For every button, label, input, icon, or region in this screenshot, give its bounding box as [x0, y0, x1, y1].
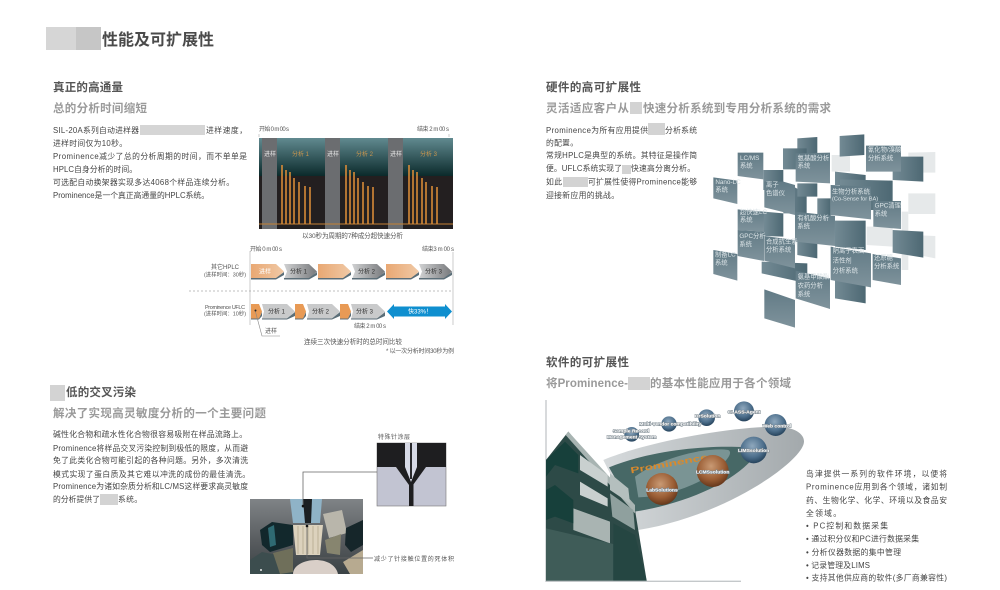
subheading: Prominence performance: [546, 376, 792, 390]
text block: hardware description: 的配置。: [546, 138, 578, 148]
title: [46, 27, 214, 50]
image: autosampler needle photo: [250, 499, 363, 574]
text block: throughput description: SIL-20A系列自动进样器: [53, 125, 139, 135]
diagram: scalable system tiles: 分析系统: [766, 244, 792, 253]
chart: timeline comparison: 连续三次快速分析时的总时间比较: [304, 337, 402, 346]
subheading: flexible systems: 灵活适应客户从: [546, 101, 630, 115]
heading: high throughput: 真正的高通量: [53, 80, 124, 94]
text block: hardware description: 便。UFLC系统实现了: [546, 163, 622, 173]
chart: timeline comparison: Prominence UFLC: [205, 305, 245, 311]
image: needle coating cross-section: [377, 443, 446, 506]
chart: chromatogram cycles: 结束 2 m 00 s: [417, 125, 449, 133]
row: other HPLC: [251, 264, 452, 280]
chart: timeline comparison: 其它HPLC: [211, 263, 240, 271]
chart: timeline comparison: * 以一次分析时间30秒为例: [386, 347, 454, 355]
diagram: scalable system tiles: 系统: [715, 258, 728, 267]
diagram: scalable system tiles: GPC分析: [739, 231, 766, 240]
diagram: scalable system tiles: 系统: [740, 160, 753, 169]
subheading: solves main problem: 解决了实现高灵敏度分析的一个主要问题: [53, 406, 266, 420]
text block: hardware description: Prominence为所有应用提供: [546, 125, 648, 135]
arrow: 33% faster: 快33%！: [408, 308, 432, 316]
diagram: scalable system tiles: 氰化物/溴酸: [868, 145, 902, 154]
row: other HPLC: 分析 2: [358, 268, 376, 276]
diagram: scalable system tiles: 系统: [740, 214, 753, 223]
sphere labels: DrSolution: [695, 413, 720, 419]
text block: hardware description: 迎接新应用的挑战。: [546, 190, 619, 200]
diagram: scalable system tiles: 生物分析系统: [832, 186, 871, 195]
diagram: scalable system tiles: 系统: [739, 239, 753, 248]
text block: software description: 岛津提供一系列的软件环境，以便将: [806, 468, 947, 478]
text block: carryover description: [53, 429, 250, 505]
label: Prominence logo: Prominence: [630, 452, 709, 475]
callout: special needle coating: [302, 433, 410, 508]
diagram: scalable system tiles: Nano-LC: [715, 179, 741, 186]
text block: hardware description: 如此: [546, 176, 562, 186]
subheading: flexible systems: 快速分析系统到专用分析系统的需求: [643, 101, 832, 115]
text block: hardware description: 分析系统: [665, 125, 697, 135]
diagram: scalable system tiles: 系统: [798, 289, 811, 298]
text block: hardware description: 快速高分离分析。: [631, 163, 695, 173]
sphere labels: LabSolutions: [646, 487, 678, 493]
chart: chromatogram cycles: 分析 1: [292, 150, 310, 158]
arrow: 33% faster: [387, 304, 452, 319]
diagram: scalable system tiles: 氨基酸分析: [798, 153, 830, 162]
diagram: scalable system tiles: 分析系统: [833, 266, 859, 275]
text block: throughput description: 可选配自动换架器实现多达4068个样品连续分析。: [53, 177, 234, 187]
text block: hardware description: [546, 123, 697, 200]
row: other HPLC: 分析 3: [425, 268, 443, 276]
heading: hardware scalability: 硬件的高可扩展性: [546, 80, 642, 94]
chart: chromatogram cycles: 分析 2: [356, 150, 374, 158]
text block: carryover description: Prominence将样品交叉污染控制到极低的限度，从而避: [53, 443, 248, 453]
chart: chromatogram cycles: 以30秒为周期的7种成分超快速分析: [302, 231, 403, 240]
sphere labels: Multi-vendor compatibility: [639, 421, 702, 427]
chart: timeline comparison: [189, 245, 454, 355]
text block: hardware description: 可扩展性使得Prominence能够: [588, 176, 697, 186]
row: Prominence UFLC: [251, 304, 452, 320]
text block: software description: 药、生物化学、化学、环境以及食品安: [806, 495, 947, 505]
diagram: scalable system tiles: LC/MS: [740, 155, 759, 162]
sphere labels: [607, 409, 792, 493]
sphere group: [624, 401, 787, 505]
row: other HPLC: 进样: [259, 268, 271, 276]
diagram: scalable system tiles: GPC清理: [875, 200, 902, 209]
text block: software description: • PC控制和数据采集: [806, 520, 888, 530]
chart: timeline comparison: 结束 2 m 00 s: [354, 322, 386, 330]
diagram: scalable system tiles: 还原糖: [874, 252, 894, 261]
chart: chromatogram cycles: 进样: [390, 150, 402, 158]
heading: low carryover: 低的交叉污染: [66, 385, 136, 399]
subheading: Prominence performance: 的基本性能应用于各个领域: [650, 376, 792, 390]
diagram: scalable system tiles: 活性剂: [833, 256, 852, 265]
chart: chromatogram cycles: [259, 125, 453, 240]
subheading: flexible systems: [546, 101, 832, 115]
text block: carryover description: 免了此类化合物可能引起的各种问题。另外，多次清洗: [53, 455, 248, 465]
text block: software description: Prominence应用到各个领域，诸如制: [806, 482, 947, 492]
diagram: scalable system tiles: 离子: [766, 180, 779, 189]
row: Prominence UFLC: 分析 3: [356, 308, 374, 316]
diagram: scalable system tiles: 系统: [797, 221, 811, 230]
chart: timeline comparison: (进样时间：30秒): [204, 270, 246, 278]
chart: chromatogram cycles: 分析 3: [420, 150, 438, 158]
row: Prominence UFLC: 分析 2: [312, 308, 330, 316]
text block: throughput description: Prominence是一个真正高通量的HPLC系统。: [53, 190, 209, 200]
chart: timeline comparison: 结束3 m 00 s: [422, 245, 454, 253]
title: 性能及可扩展性: [102, 30, 214, 49]
callout: reduced dead volume: 减少了针接触位置的死体积: [374, 555, 454, 563]
swoosh: [603, 427, 804, 530]
diagram: scalable system tiles: 超快速LC: [740, 207, 767, 216]
diagram: scalable system tiles: 有机酸分析: [797, 213, 830, 222]
diagram: scalable system tiles: 合成抗生素: [766, 236, 798, 245]
panel: hardware scalability: [546, 80, 935, 328]
text block: software description: • 分析仪器数据的集中管理: [806, 547, 901, 557]
sphere labels: CLASS-Agent: [728, 409, 761, 415]
chart: timeline comparison: 开始 0 m 00 s: [250, 245, 282, 253]
diagram: scalable system tiles: 分析系统: [874, 261, 900, 270]
text block: throughput description: 进样速度，: [206, 125, 247, 135]
diagram: scalable system tiles: 阴离子表面: [833, 246, 864, 255]
text block: carryover description: 碱性化合物和疏水性化合物很容易吸附在样品流路上。: [53, 429, 247, 439]
sphere labels: LCMSsolution: [696, 469, 729, 475]
text block: software description: [806, 468, 947, 582]
subheading: Prominence performance: 将Prominence-: [546, 376, 628, 390]
diagram: software environment: [546, 400, 804, 581]
text block: throughput description: Prominence减少了总的分析周期的时间，而不单单是: [53, 151, 247, 161]
text block: carryover description: Prominence为诸如杂质分析和LC/MS这样要求高灵敏度: [53, 481, 248, 491]
sphere labels: Sample Record: [613, 428, 649, 434]
chart: chromatogram cycles: 开始 0 m 00 s: [259, 125, 289, 133]
diagram: scalable system tiles: 分析系统: [868, 153, 894, 162]
text block: carryover description: 模式实现了蛋白质及其它难以冲洗的成份的最佳清洗。: [53, 469, 250, 479]
chart: chromatogram cycles: 进样: [327, 150, 339, 158]
subheading: total analysis time: 总的分析时间缩短: [53, 101, 148, 115]
sphere labels: Web control: [763, 423, 792, 429]
diagram: scalable system tiles: 系统: [798, 160, 811, 169]
diagram: scalable system tiles: 氨基甲酸酯: [798, 272, 829, 281]
diagram: scalable system tiles: 色谱仪: [766, 188, 786, 197]
chart: timeline comparison: 进样: [265, 327, 277, 335]
instrument tower: [546, 432, 647, 581]
text block: software description: • 支持其他供应商的软件(多厂商兼容性): [806, 572, 947, 582]
callout: special needle coating: 特殊针涂层: [378, 433, 410, 441]
heading: software scalability: 软件的可扩展性: [546, 355, 630, 369]
text block: throughput description: HPLC自身分析的时间。: [53, 164, 137, 174]
diagram: scalable system tiles: [713, 134, 935, 328]
text block: carryover description: 系统。: [118, 494, 142, 504]
diagram: scalable system tiles: 制备LC: [715, 250, 736, 259]
callout: reduced dead volume: [306, 525, 454, 563]
row: other HPLC: 分析 1: [290, 268, 308, 276]
text block: software description: • 记录管理及LIMS: [806, 560, 870, 570]
row: Prominence UFLC: 分析 1: [268, 308, 286, 316]
diagram: scalable system tiles: (Co-Sense for BA): [832, 197, 878, 203]
text block: carryover description: 的分析提供了: [53, 494, 100, 504]
text block: software description: 全领域。: [806, 508, 841, 518]
sphere labels: LIMSsolution: [738, 448, 769, 454]
chart: chromatogram cycles: 进样: [264, 150, 276, 158]
sphere labels: Management System: [607, 435, 657, 441]
text block: hardware description: 常规HPLC是典型的系统。其特征是操作简: [546, 150, 697, 160]
text block: throughput description: [53, 125, 247, 200]
diagram: scalable system tiles: 系统: [715, 184, 729, 193]
diagram: scalable system tiles: 农药分析: [798, 280, 824, 289]
text block: software description: • 通过积分仪和PC进行数据采集: [806, 534, 919, 544]
panel: low carryover: [50, 385, 454, 574]
panel: software scalability: [546, 355, 947, 582]
panel: high throughput: [53, 80, 454, 355]
chart: timeline comparison: (进样时间：10秒): [204, 310, 246, 318]
diagram: scalable system tiles: 系统: [875, 208, 888, 217]
heading: low carryover: [50, 385, 136, 401]
text block: throughput description: 进样时间仅为10秒。: [53, 138, 127, 148]
